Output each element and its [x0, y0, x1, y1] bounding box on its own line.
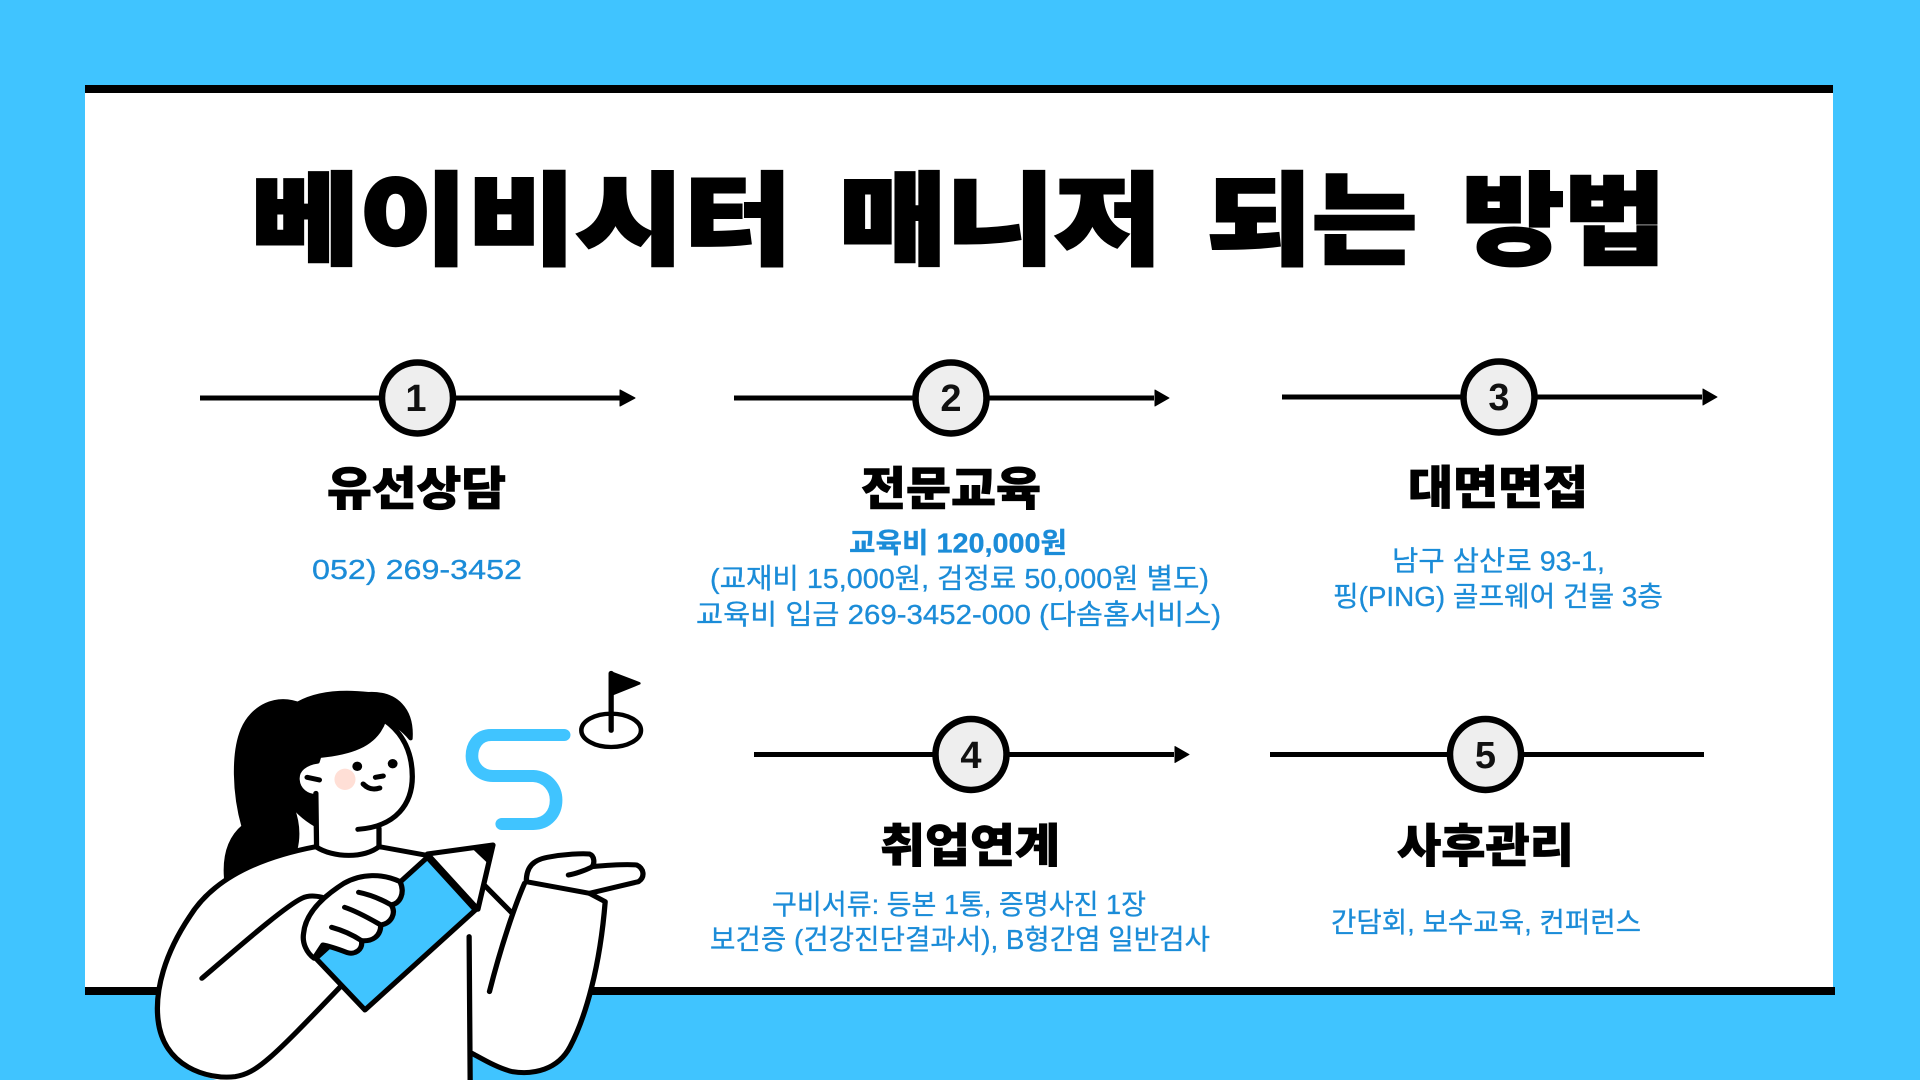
heading 2: 전문교육	[861, 453, 1041, 519]
step 4	[710, 719, 1210, 955]
text 2: 교육비 120,000원	[849, 528, 1067, 558]
icon: hand holding pencil	[303, 876, 402, 958]
icon: ponytail	[226, 701, 300, 878]
icon: winding path	[472, 735, 564, 824]
heading 3: 대면면접	[1408, 452, 1588, 518]
text 4	[710, 889, 1210, 955]
text 4: 구비서류: 등본 1통, 증명사진 1장	[772, 889, 1146, 920]
icon: hair	[269, 693, 411, 825]
arrow 3	[1282, 389, 1717, 405]
number badge 4	[936, 719, 1006, 790]
number badge 1	[382, 362, 453, 434]
title: 매니저	[839, 166, 1162, 278]
arrow 2	[734, 390, 1169, 406]
icon: ear	[302, 765, 318, 794]
heading 1: 유선상담	[327, 453, 506, 519]
body	[157, 847, 605, 1080]
text 3	[1333, 546, 1663, 612]
text 5: 간담회, 보수교육, 컨퍼런스	[1331, 907, 1641, 938]
number badge 4: 4	[960, 735, 982, 777]
text 3: 남구 삼산로 93-1,	[1392, 546, 1605, 576]
step 1	[200, 362, 635, 585]
step 3	[1282, 362, 1717, 612]
illustration: woman holding pencil	[157, 673, 643, 1080]
icon: golf flag	[581, 673, 641, 747]
number badge 5	[1450, 719, 1521, 790]
text 1: 052) 269-3452	[312, 554, 522, 585]
icon: open hand	[526, 854, 643, 893]
heading 5: 사후관리	[1397, 810, 1574, 876]
icon: face	[316, 720, 412, 855]
text 2: 교육비 입금 269-3452-000 (다솜홈서비스)	[696, 599, 1221, 630]
title: 되는	[1207, 166, 1417, 278]
title	[251, 166, 1666, 278]
text 4: 보건증 (건강진단결과서), B형간염 일반검사	[710, 924, 1210, 955]
number badge 1: 1	[405, 378, 427, 420]
text 2	[696, 528, 1221, 630]
icon: pencil	[316, 845, 493, 1010]
arrow 1	[200, 390, 635, 406]
arrow 4	[754, 746, 1189, 762]
number badge 2: 2	[940, 378, 962, 420]
number badge 5: 5	[1475, 735, 1496, 777]
body outlines	[157, 847, 605, 1080]
step 5	[1270, 719, 1704, 938]
line 5	[1270, 752, 1704, 757]
panel: white board	[85, 85, 1835, 995]
text 2: (교재비 15,000원, 검정료 50,000원 별도)	[710, 563, 1209, 594]
text 3: 핑(PING) 골프웨어 건물 3층	[1333, 581, 1663, 612]
title: 베이비시터	[251, 166, 792, 278]
title: 방법	[1462, 166, 1666, 278]
heading 4: 취업연계	[880, 810, 1060, 876]
number badge 3: 3	[1488, 377, 1510, 419]
step 2	[696, 362, 1221, 630]
number badge 3	[1464, 362, 1534, 432]
face details	[307, 720, 412, 847]
number badge 2	[916, 362, 986, 434]
